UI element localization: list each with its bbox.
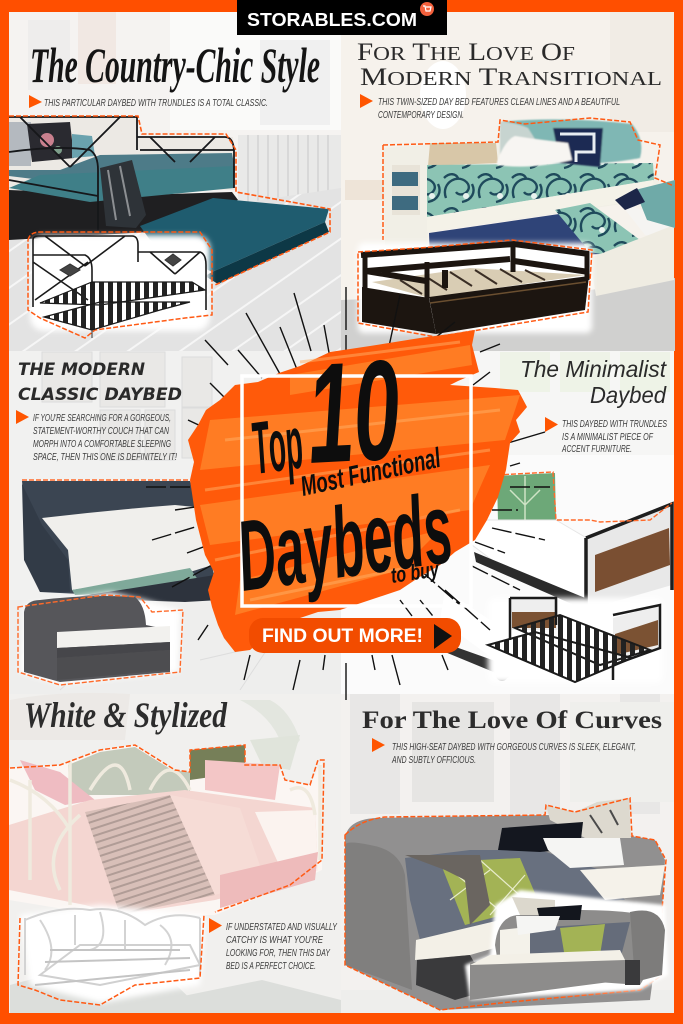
heading: for the love of modern transitional: MODERN TRANSITIONAL: [360, 64, 662, 91]
icon: grey upholstered daybed photo: [22, 480, 222, 602]
icon: daybed frame inset: [28, 232, 212, 338]
heading: the country-chic style: The Country-Chic Style: [30, 37, 320, 93]
headline: top 10 most functional daybeds to buy: Daybeds: [230, 472, 459, 613]
icon: grey sofa daybed inset: [18, 592, 183, 685]
text: love of curves description: AND SUBTLY OFFICIOUS.: [391, 754, 476, 766]
text: minimalist description: ACCENT FURNITURE.: [561, 443, 632, 455]
heading: the modern classic daybed: THE MODERN: [18, 360, 145, 380]
text: white and stylized description: IF UNDERSTATED AND VISUALLY: [226, 921, 338, 933]
panel: white and stylized daybed: [9, 693, 342, 1013]
text: minimalist description: [561, 418, 667, 455]
text: country-chic description: THIS PARTICULAR DAYBED WITH TRUNDLES IS A TOTAL CLASSIC.: [44, 97, 268, 109]
orange brush stroke: [188, 330, 527, 652]
headline: top 10 most functional daybeds to buy: 10: [303, 330, 403, 494]
icon: pink bedding daybed photo: [9, 745, 324, 915]
text: modern classic description: IF YOU'RE SEARCHING FOR A GORGEOUS,: [33, 412, 171, 424]
icon: arrow: [372, 738, 385, 752]
icon: white daybed photo: [345, 118, 675, 296]
text: modern classic description: STATEMENT-WORTHY COUCH THAT CAN: [33, 425, 169, 437]
icon: white metal frame inset: [18, 905, 205, 1005]
text: modern transitional description: [378, 96, 620, 121]
panel: love of curves daybed: [341, 694, 674, 1013]
sunburst rays: [146, 287, 550, 700]
button: find out more: [249, 618, 461, 653]
icon: dark wooden daybed inset: [358, 240, 592, 337]
headline: top 10 most functional daybeds to buy: to buy: [389, 556, 441, 588]
heading: for the love of curves: For The Love Of Curves: [362, 707, 662, 734]
heading: white and stylized: White & Stylized: [24, 695, 228, 735]
heading: the minimalist daybed: Daybed: [590, 382, 667, 408]
panel: minimalist daybed: [341, 351, 674, 694]
headline: top 10 most functional daybeds to buy: Top: [247, 401, 308, 490]
heading: for the love of modern transitional: FOR THE LOVE OF: [357, 39, 575, 66]
heading: for the love of modern transitional: [357, 39, 662, 91]
icon: daybed with trundle photo: [9, 116, 330, 285]
heading: the minimalist daybed: [520, 356, 668, 408]
icon: arrow: [360, 94, 373, 108]
panel: modern transitional daybed: [341, 12, 675, 351]
text: modern classic description: MORPH INTO A COMFORTABLE SLEEPING: [33, 438, 171, 450]
text: white and stylized description: LOOKING FOR, THEN THIS DAY: [226, 947, 331, 959]
text: modern transitional description: CONTEMPORARY DESIGN.: [378, 109, 464, 121]
heading: the modern classic daybed: CLASSIC DAYBED: [18, 385, 182, 405]
icon: arrow: [16, 410, 29, 424]
panel: country-chic daybed: [9, 12, 341, 351]
text: modern classic description: SPACE, THEN THIS ONE IS DEFINITELY IT!: [33, 451, 177, 463]
text: white and stylized description: [226, 921, 338, 972]
icon: curved daybed inset: [465, 890, 668, 1000]
heading: the minimalist daybed: The Minimalist: [520, 356, 668, 382]
header logo: storables.com: [237, 0, 447, 35]
text: love of curves description: [391, 741, 636, 766]
icon: wood and metal daybed photo: [440, 472, 672, 681]
icon: arrow: [209, 918, 222, 933]
panel: modern classic daybed: [9, 351, 342, 694]
icon: metal trundle frame inset: [488, 598, 663, 683]
white square frame: [242, 376, 471, 606]
header logo: storables.com: STORABLES.COM: [247, 10, 417, 30]
icon: arrow: [29, 95, 42, 108]
button: find out more: FIND OUT MORE!: [262, 626, 423, 647]
headline: top 10 most functional daybeds to buy: [230, 330, 459, 613]
heading: the modern classic daybed: [18, 360, 182, 405]
text: modern classic description: [33, 412, 177, 463]
text: white and stylized description: BED IS A PERFECT CHOICE.: [226, 960, 316, 972]
icon: grey curved daybed photo: [345, 798, 666, 1010]
text: white and stylized description: CATCHY IS WHAT YOU'RE: [226, 934, 324, 946]
icon: arrow: [545, 417, 558, 432]
headline: top 10 most functional daybeds to buy: Most Functional: [298, 442, 444, 502]
